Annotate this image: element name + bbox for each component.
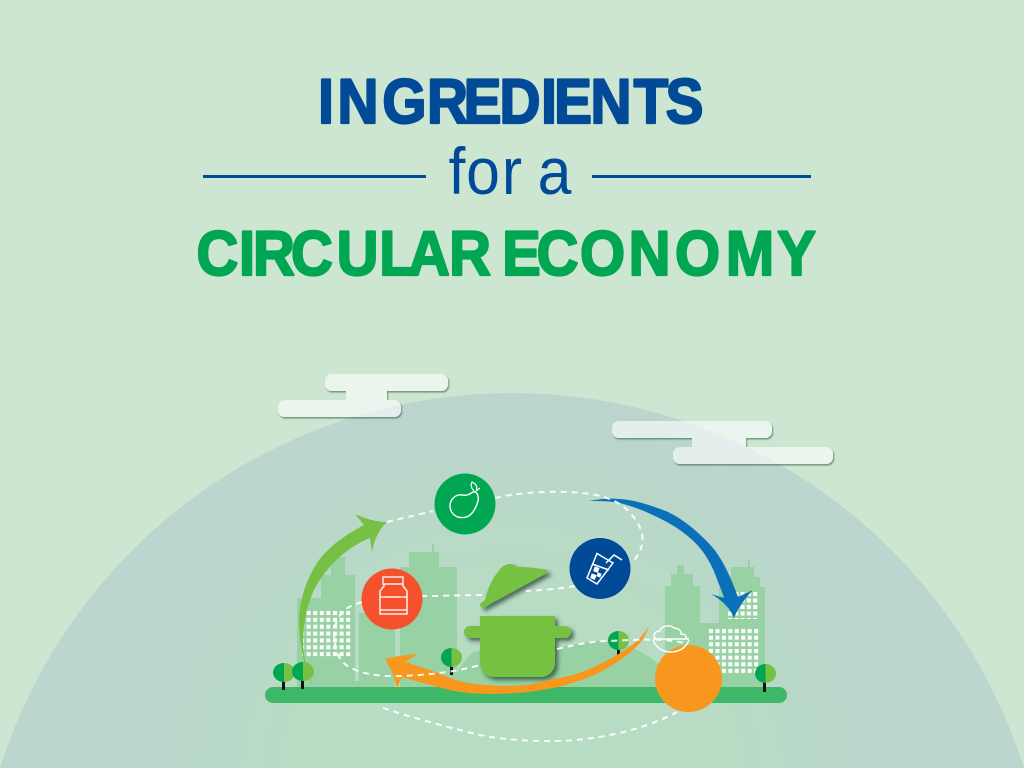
- pot: [464, 564, 571, 677]
- dome: globe horizon: [0, 393, 1024, 768]
- ground: [265, 687, 787, 703]
- pot body: [464, 616, 571, 677]
- city skyline left: [297, 544, 457, 687]
- city skyline right: [665, 560, 765, 687]
- windows right upper: [728, 592, 758, 619]
- dashed circular path: [334, 492, 687, 741]
- icon: orange bowl circle: [655, 645, 722, 712]
- icon: bowl outline: [653, 626, 689, 652]
- tree 3: [441, 648, 462, 675]
- cloud left: [278, 374, 448, 417]
- divider right: [592, 175, 811, 178]
- heading: for a: for a: [449, 136, 572, 209]
- heading: INGREDIENTS: INGREDIENTS: [318, 66, 703, 137]
- arrow: orange: [385, 626, 649, 694]
- pot lid: [480, 564, 548, 608]
- tree 4: [608, 631, 629, 658]
- windows right lower: [709, 629, 758, 674]
- tree 1: [273, 663, 295, 690]
- windows left: [302, 611, 350, 658]
- tree 2: [292, 662, 314, 689]
- icon: pear circle: [434, 474, 496, 534]
- icon: jar circle: [362, 568, 422, 630]
- tree 5: [755, 664, 776, 692]
- cloud right: [612, 421, 833, 464]
- title: [197, 66, 816, 289]
- heading: CIRCULAR ECONOMY: CIRCULAR ECONOMY: [197, 218, 816, 289]
- arrow: blue: [589, 499, 753, 618]
- divider left: [203, 175, 426, 178]
- arrow: green: [299, 514, 387, 685]
- icon: drink circle: [570, 538, 630, 599]
- hill: [452, 641, 675, 687]
